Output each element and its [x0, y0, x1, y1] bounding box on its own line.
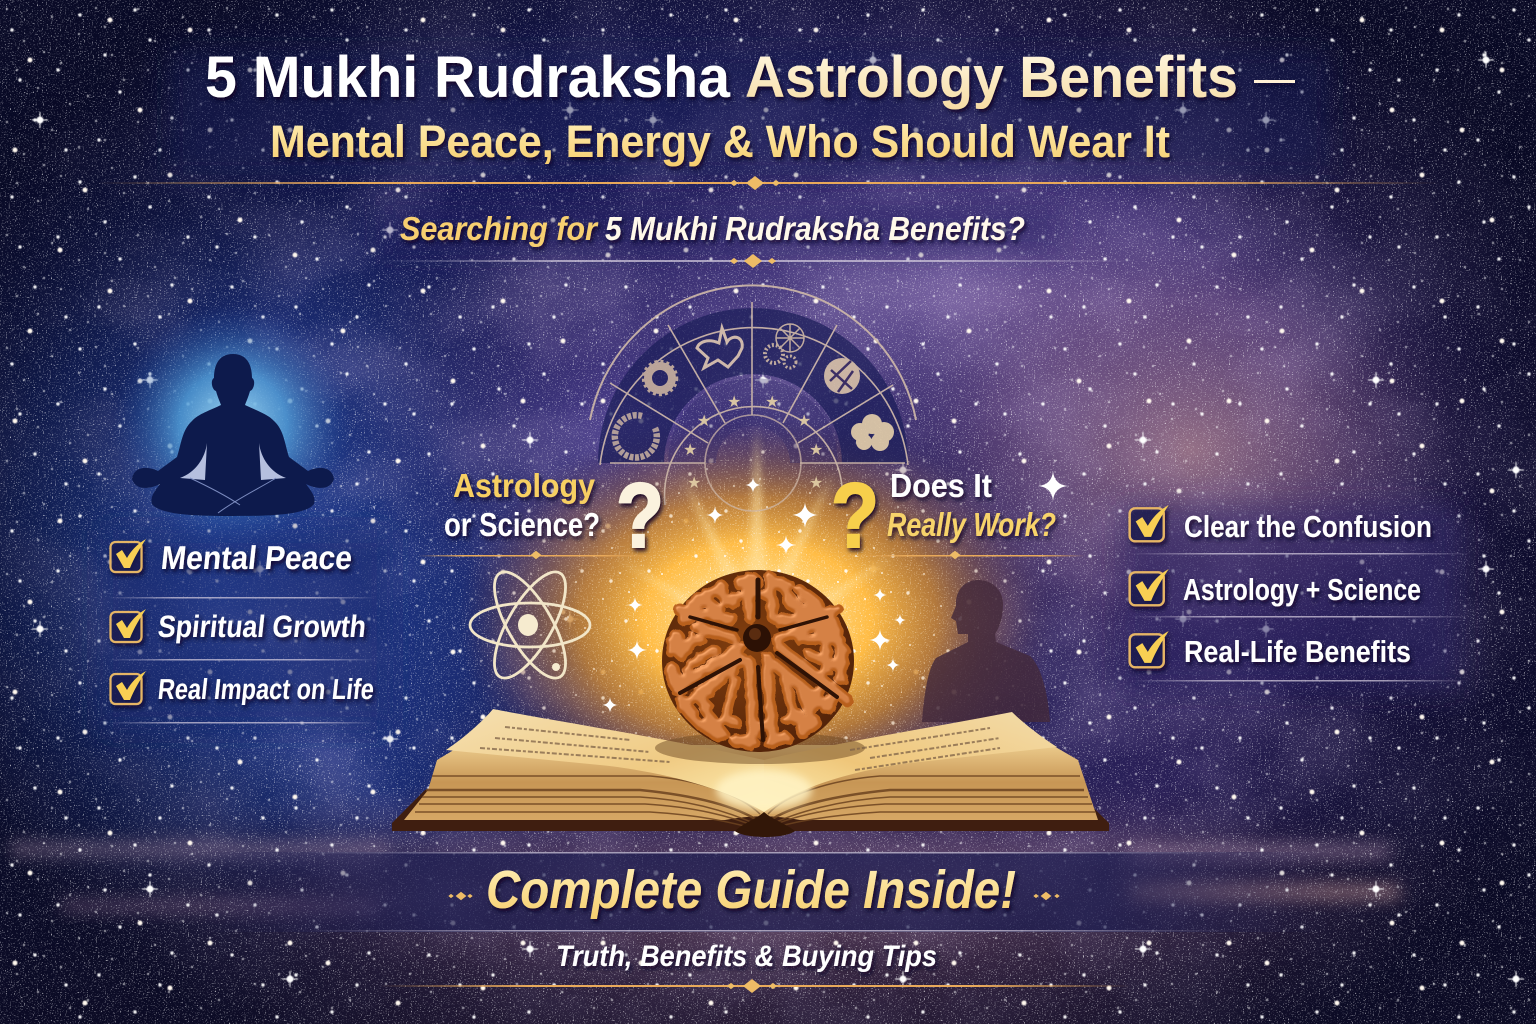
zodiac icon: lotus [697, 328, 742, 368]
title [205, 45, 1295, 167]
title divider [95, 176, 1440, 190]
book [392, 709, 1109, 837]
check item: clear the confusion: Clear the Confusion [1184, 509, 1432, 544]
silhouette: questioning person [922, 580, 1050, 722]
right page [764, 712, 1057, 812]
check item: spiritual growth: Spiritual Growth [156, 609, 368, 644]
left question: astrology or science: Astrology [453, 467, 596, 504]
check item: real-life benefits: Real-Life Benefits [1184, 634, 1411, 669]
left question: astrology or science: or Science? [444, 506, 600, 543]
zodiac icon: gear [644, 362, 676, 394]
ornament right [1033, 892, 1060, 900]
left question: astrology or science [418, 465, 664, 567]
central golden glow [464, 423, 1046, 745]
zodiac stars: ★ [683, 442, 697, 459]
zodiac wheel [590, 285, 916, 511]
bead grooves [680, 580, 837, 740]
check item: real impact on life: Real Impact on Life [156, 674, 376, 706]
rudraksha bead [662, 570, 854, 752]
zodiac stars: ★ [765, 394, 779, 411]
zodiac icon: wreath [615, 415, 657, 457]
soft dark zones behind text [170, 50, 1330, 175]
panel: right benefits [1130, 505, 1470, 682]
page text lines [480, 727, 1000, 770]
check item: clear the confusion [1130, 505, 1432, 544]
zodiac icon: wheel [765, 324, 804, 368]
subtitle divider [380, 254, 1130, 268]
nebula streaks at the horizon [10, 842, 390, 856]
zodiac icon: flower [851, 414, 894, 451]
title: Astrology Benefits [745, 45, 1238, 110]
subtitle: 5 Mukhi Rudraksha Benefits? [605, 210, 1025, 247]
zodiac icon: round seal [824, 358, 860, 394]
title: Mental Peace, Energy & Who Should Wear It [270, 116, 1170, 167]
right question: does it really work: Really Work? [887, 506, 1056, 543]
zodiac stars: ★ [697, 413, 711, 430]
check item: astrology + science: Astrology + Science [1183, 572, 1421, 607]
check item: mental peace: Mental Peace [159, 540, 354, 577]
check item: astrology + science [1130, 569, 1421, 607]
zodiac stars [683, 394, 823, 492]
bottom divider [380, 979, 1130, 993]
call to action text: Complete Guide Inside! [486, 860, 1016, 920]
subtitle [400, 210, 1025, 247]
right question: does it really work: Does It [890, 467, 992, 504]
ornament left [448, 892, 473, 900]
icon: atom [470, 562, 590, 688]
book shadow under bead [655, 732, 865, 764]
left page [446, 709, 764, 812]
panel: left benefits [107, 305, 377, 724]
zodiac stars: ★ [797, 413, 811, 430]
subtitle: Searching for [400, 210, 599, 247]
title: 5 Mukhi Rudraksha [205, 45, 731, 110]
check item: real-life benefits [1130, 631, 1411, 669]
meditating figure [113, 305, 353, 545]
zodiac stars: ★ [809, 442, 823, 459]
right question: does it really work: ? [831, 465, 879, 567]
zodiac stars: ★ [809, 475, 823, 492]
right question: does it really work [792, 465, 1085, 567]
bead centre [743, 624, 771, 652]
call to action band [200, 852, 1330, 932]
zodiac stars: ★ [727, 394, 741, 411]
left question: astrology or science: ? [616, 465, 664, 567]
zodiac stars: ★ [687, 475, 701, 492]
check item: real impact on life [110, 671, 376, 706]
tagline: Truth, Benefits & Buying Tips [556, 940, 937, 973]
